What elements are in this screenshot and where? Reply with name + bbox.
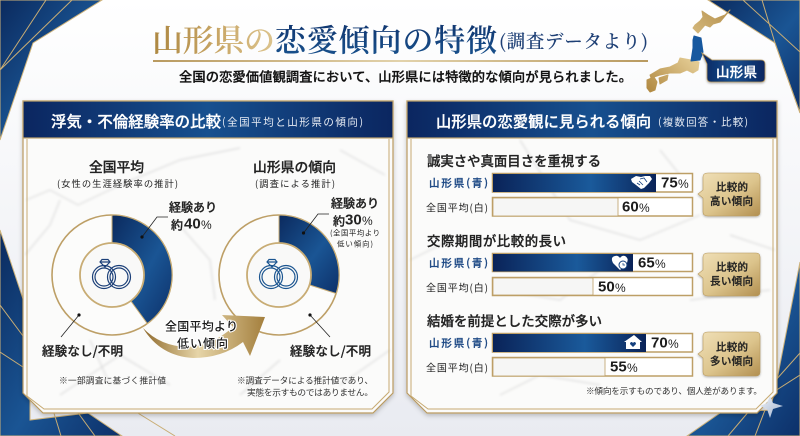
title (152, 16, 648, 60)
callout: relatively long (698, 253, 760, 296)
callout: relatively many (698, 332, 760, 376)
heading: Yamagata tendency (253, 156, 336, 190)
note: survey caveat: 実態を示すものではありません。 (247, 386, 373, 398)
row: national 60%: 全国平均(白) (426, 200, 488, 214)
panel: love views in Yamagata (407, 101, 777, 413)
donut chart: Yamagata (219, 215, 339, 335)
label: experienced 30%: 約 (333, 212, 345, 230)
icon: heart and clock (612, 256, 628, 270)
row: national 50%: 50 (598, 278, 615, 296)
panel header: (複数回答・比較) (658, 114, 748, 130)
panel header: (全国平均と山形県の傾向) (222, 114, 363, 130)
heading: Yamagata tendency: 山形県の傾向 (253, 156, 336, 176)
label: none or unknown, national: 経験なし/不明 (42, 340, 123, 360)
label: experienced 30% (302, 194, 380, 250)
label: Yamagata: 山形県 (716, 61, 757, 81)
marble veins (25, 148, 390, 395)
icon: wedding rings (260, 260, 298, 288)
row: Yamagata 75%: % (678, 177, 689, 191)
label: experienced 30%: % (362, 214, 373, 228)
row: national 55% (426, 358, 692, 376)
row: national 60% (426, 198, 692, 216)
row: national 55%: % (627, 361, 638, 375)
callout: relatively long: 長い傾向 (710, 274, 753, 288)
row: Yamagata 70%: % (668, 337, 679, 351)
item: sincerity: 誠実さや真面目さを重視する (427, 150, 601, 170)
heading: Yamagata tendency: (調査による推計) (255, 176, 335, 190)
decorative corner: bottom left (0, 230, 175, 436)
icon: house with heart (624, 335, 642, 349)
heading: national average (57, 156, 178, 190)
label: experienced 30%: 経験あり (331, 194, 379, 212)
row: national 55%: 55 (610, 358, 627, 376)
callout: relatively high: 高い傾向 (710, 194, 753, 208)
title: 恋愛傾向の特徴 (275, 16, 497, 60)
subtitle: 全国の恋愛価値観調査において、山形県には特徴的な傾向が見られました。 (179, 66, 632, 86)
marble veins (410, 140, 775, 395)
row: Yamagata 75%: 山形県(青) (429, 176, 488, 190)
item: marriage-minded dating (426, 310, 760, 376)
item: long relationships: 交際期間が比較的長い (427, 230, 566, 250)
note: survey caveat: ※調査データによる推計値であり、 (237, 374, 373, 386)
title underline (153, 60, 648, 62)
row: Yamagata 75% (429, 174, 692, 192)
heading: national average: 全国平均 (89, 156, 144, 176)
note: survey caveat (237, 374, 373, 398)
row: national 60%: % (639, 201, 650, 215)
label: none or unknown, Yamagata (290, 313, 371, 360)
row: Yamagata 70% (429, 334, 692, 352)
row: Yamagata 70%: 山形県(青) (429, 336, 488, 350)
row: Yamagata 65%: % (655, 257, 666, 271)
decorative corner: bottom right (687, 262, 800, 436)
row: national 50%: 全国平均(白) (426, 280, 488, 294)
callout: relatively high (698, 173, 760, 216)
callout: relatively high: 比較的 (716, 180, 748, 194)
row: Yamagata 75%: 75 (661, 174, 678, 192)
label: experienced 40%: 約 (171, 216, 183, 234)
label: none or unknown, Yamagata: 経験なし/不明 (290, 340, 371, 360)
label: experienced 40%: % (201, 218, 212, 232)
item: sincerity (426, 150, 760, 216)
label: experienced 40%: 40 (184, 216, 201, 232)
label: Yamagata (702, 53, 765, 82)
row: national 50% (426, 278, 692, 296)
panel header (23, 101, 393, 138)
icon: map of Japan with Yamagata highlighted (647, 10, 730, 92)
item: long relationships (426, 230, 760, 296)
callout: relatively many: 比較的 (716, 340, 748, 354)
icon: wedding rings (92, 260, 130, 288)
label: none or unknown, national (42, 313, 123, 360)
title: (調査データより) (499, 28, 648, 54)
decorative corner: top left (0, 0, 102, 140)
row: national 55%: 全国平均(白) (426, 360, 488, 374)
label: experienced 30%: 30 (345, 212, 362, 228)
row: Yamagata 65%: 65 (638, 254, 655, 272)
row: national 60%: 60 (622, 198, 639, 216)
label: experienced 30%: (全国平均より (330, 228, 380, 238)
callout: relatively long: 比較的 (716, 260, 748, 274)
callout: relatively many: 多い傾向 (710, 354, 753, 368)
arrow: lower than national average: 全国平均より (165, 318, 238, 334)
row: Yamagata 65% (429, 254, 692, 272)
label: experienced 40%: 経験あり (169, 198, 217, 216)
panel header: 山形県の恋愛観に見られる傾向 (436, 110, 651, 132)
icon: sparkle star (760, 396, 783, 418)
arrow: lower than national average: 低い傾向 (177, 334, 228, 352)
title: 山形県の (152, 16, 275, 60)
note: individual differences: ※傾向を示すものであり、個人差があります。 (586, 385, 762, 397)
heading: national average: (女性の生涯経験率の推計) (57, 176, 178, 190)
note: national estimate: ※一部調査に基づく推計値 (59, 374, 166, 386)
panel: infidelity experience comparison (23, 101, 393, 413)
label: experienced 30%: 低い傾向) (337, 238, 373, 250)
panel header (407, 101, 777, 138)
decorative corner: top right (708, 0, 800, 113)
row: Yamagata 65%: 山形県(青) (429, 256, 488, 270)
row: Yamagata 70%: 70 (651, 334, 668, 352)
donut chart: national average (52, 215, 172, 335)
panel header: 浮気・不倫経験率の比較 (51, 110, 222, 132)
row: national 50%: % (615, 281, 626, 295)
arrow: lower than national average (143, 315, 265, 358)
icon: handshake (631, 176, 652, 189)
item: marriage-minded dating: 結婚を前提とした交際が多い (427, 310, 602, 330)
label: experienced 40% (140, 198, 217, 239)
